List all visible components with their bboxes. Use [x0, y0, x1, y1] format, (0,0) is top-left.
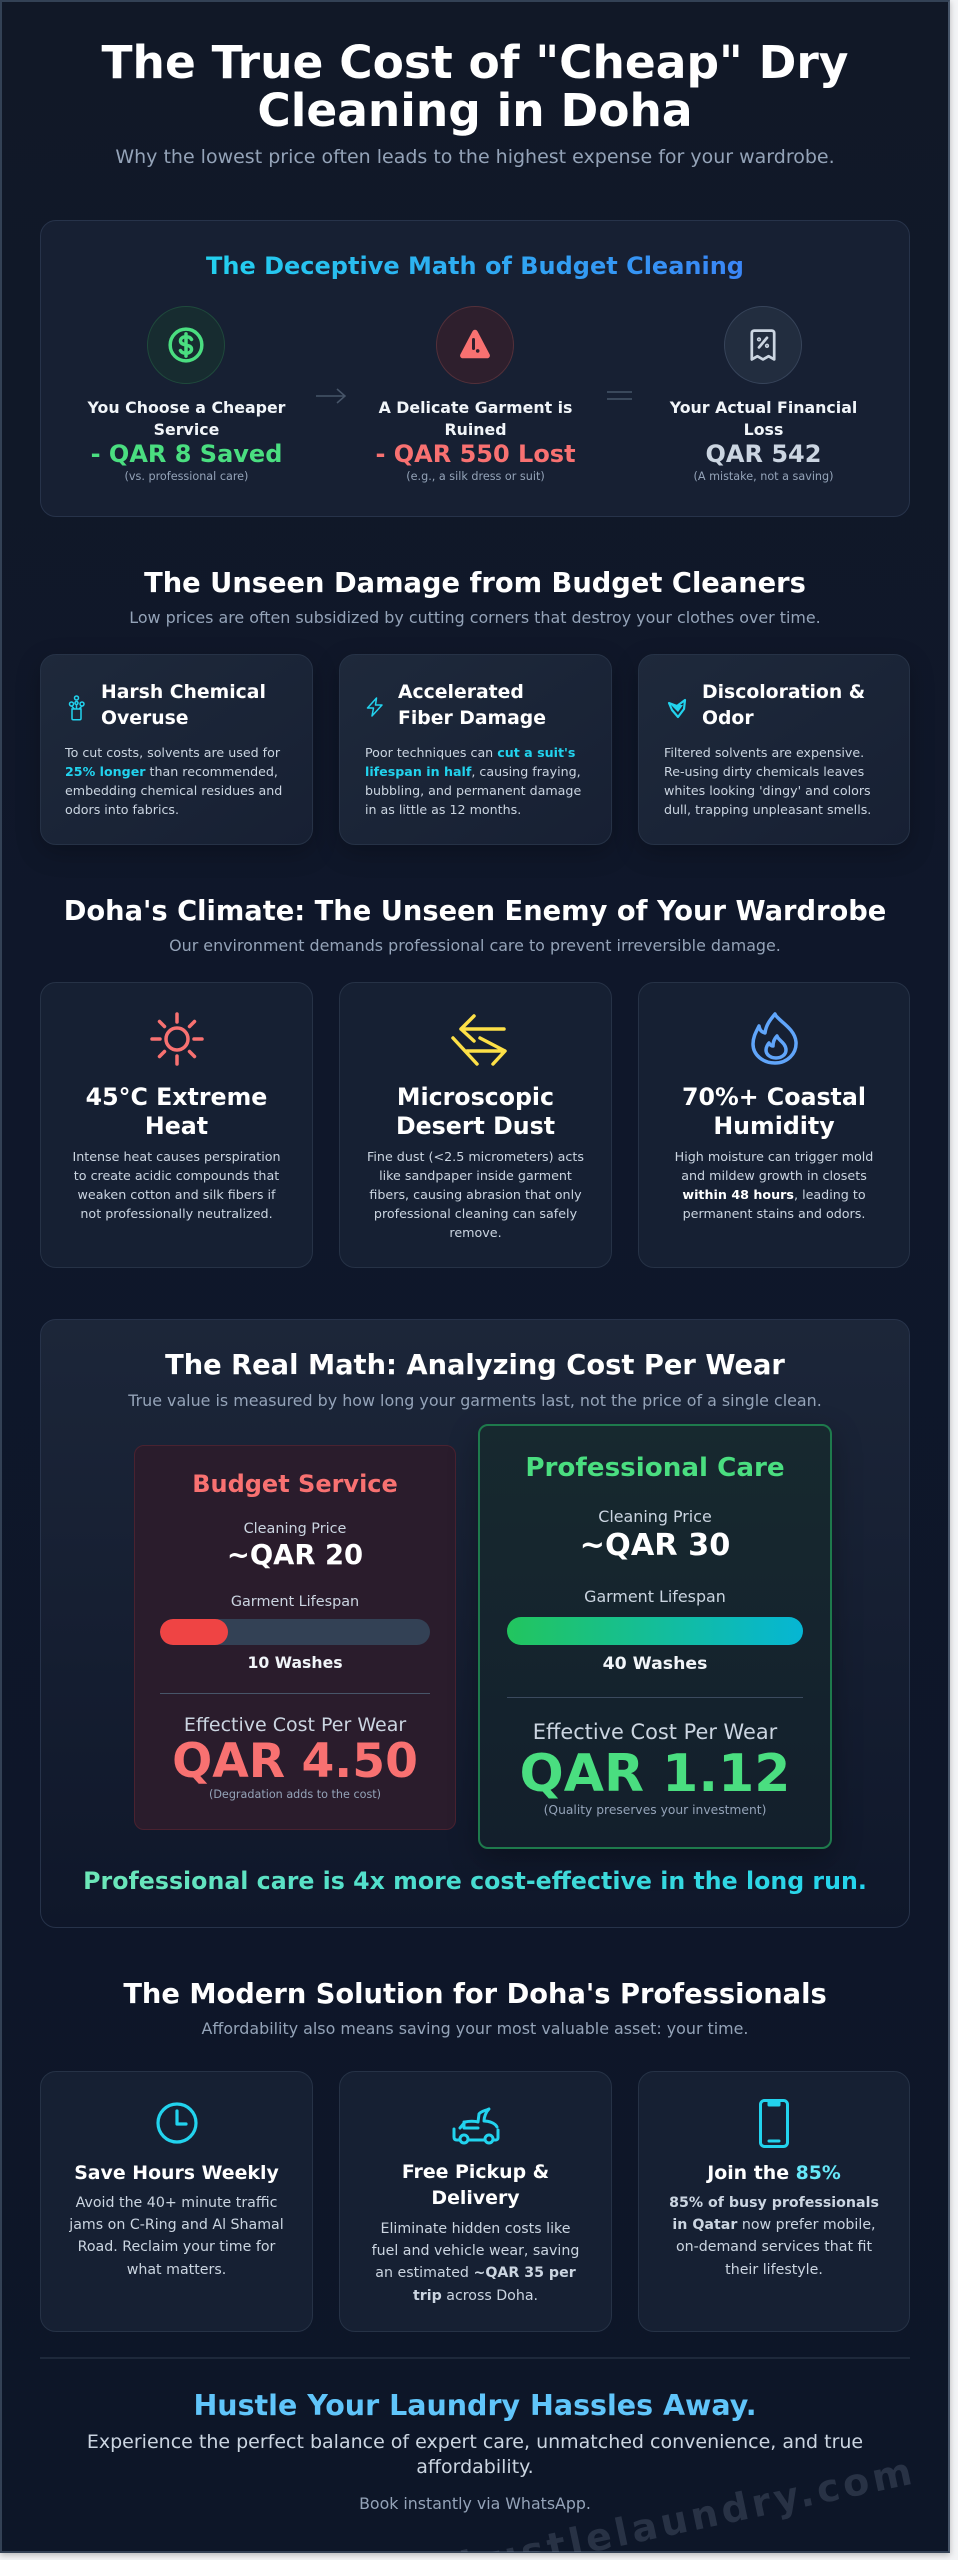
card heading	[682, 1083, 866, 1140]
subheading: real math: True value is measured by how long your garments last, not the price of a single clean.	[128, 1391, 822, 1410]
step 1 text: - QAR 8 Saved	[91, 440, 282, 468]
lifespan bar	[507, 1617, 803, 1645]
card body: whites looking 'dingy' and colors	[664, 783, 871, 798]
card body: Re-using dirty chemicals leaves	[664, 764, 864, 779]
step 2 text: A Delicate Garment is	[379, 398, 572, 417]
professional care card	[478, 1424, 832, 1849]
step 2 text: (e.g., a silk dress or suit)	[406, 470, 545, 483]
card heading	[396, 1083, 555, 1140]
card: fiber damage	[339, 654, 612, 845]
step 2 text: - QAR 550 Lost	[375, 440, 576, 468]
price value: ~QAR 20	[227, 1540, 363, 1571]
card body: remove.	[449, 1225, 502, 1240]
icon: warning triangle	[436, 306, 514, 384]
card heading: Harsh Chemical	[101, 682, 266, 703]
budget service card	[134, 1445, 456, 1830]
card: save hours	[40, 2071, 313, 2332]
divider	[160, 1693, 430, 1694]
step 2 text	[375, 398, 576, 483]
icon: flame	[751, 1012, 798, 1065]
card body: Road. Reclaim your time for	[78, 2239, 275, 2255]
call to action text: Experience the perfect balance of expert care, unmatched convenience, and true	[87, 2431, 863, 2453]
card body: dull, trapping unpleasant smells.	[664, 802, 871, 817]
step 3 text: Loss	[744, 420, 783, 439]
effective cost label: Effective Cost Per Wear	[184, 1714, 406, 1736]
heading: modern solution: The Modern Solution for Doha's Professionals	[123, 1979, 827, 2010]
card body: weaken cotton and silk fibers if	[78, 1187, 275, 1202]
card body: what matters.	[127, 2262, 226, 2278]
icon: dollar coin	[147, 306, 225, 384]
card: join	[638, 2071, 910, 2332]
card body: jams on C-Ring and Al Shamal	[69, 2217, 284, 2233]
heading: climate: Doha's Climate: The Unseen Enemy of Your Wardrobe	[64, 896, 886, 927]
step 1 text: You Choose a Cheaper	[88, 398, 285, 417]
card heading: Save Hours Weekly	[74, 2162, 279, 2184]
heading: unseen damage: The Unseen Damage from Budget Cleaners	[144, 568, 806, 599]
card body: bubbling, and permanent damage	[365, 783, 581, 798]
card heading: Join the 85%	[707, 2162, 841, 2184]
card body: trip across Doha.	[413, 2288, 538, 2304]
call to action text	[87, 2431, 863, 2478]
professional heading: Professional Care	[525, 1453, 785, 1483]
card body: professional cleaning can safely	[374, 1206, 577, 1221]
card heading	[702, 682, 865, 729]
title	[102, 36, 848, 136]
price value: ~QAR 30	[580, 1528, 730, 1563]
card heading: Humidity	[713, 1112, 835, 1140]
lifespan label: Garment Lifespan	[231, 1594, 359, 1610]
card heading: Accelerated	[398, 682, 524, 703]
degradation note: (Degradation adds to the cost)	[209, 1788, 381, 1801]
card body: Poor techniques can cut a suit's	[365, 745, 575, 760]
effective cost value: QAR 4.50	[172, 1734, 418, 1789]
icon: clock	[156, 2102, 198, 2144]
step 1 text: Service	[154, 420, 219, 439]
card body: to create acidic compounds that	[74, 1168, 279, 1183]
step 2 text: Ruined	[444, 420, 507, 439]
card heading: 70%+ Coastal	[682, 1083, 866, 1111]
card body	[69, 2195, 284, 2278]
card body	[372, 2221, 579, 2304]
card heading: Fiber Damage	[398, 708, 546, 729]
card heading: Overuse	[101, 708, 188, 729]
card body: within 48 hours, leading to	[682, 1187, 866, 1202]
step 3 text: QAR 542	[706, 440, 821, 468]
card body	[367, 1149, 584, 1240]
step 1 text	[87, 398, 286, 483]
card body: an estimated ~QAR 35 per	[375, 2265, 576, 2281]
card body: Filtered solvents are expensive.	[664, 745, 864, 760]
card body: Avoid the 40+ minute traffic	[76, 2195, 277, 2211]
card body	[365, 745, 581, 817]
divider	[507, 1697, 803, 1698]
card heading: Free Pickup &	[402, 2161, 549, 2183]
card heading	[101, 682, 266, 729]
cleaning price: Cleaning Price	[244, 1521, 346, 1537]
icon: bolt	[366, 697, 383, 717]
card body: and mildew growth in closets	[681, 1168, 867, 1183]
title: Cleaning in Doha	[257, 84, 693, 136]
subheading: modern solution: Affordability also means saving your most valuable asset: your time.	[202, 2019, 748, 2038]
title: The True Cost of "Cheap" Dry	[102, 36, 848, 89]
card body: fuel and vehicle wear, saving	[372, 2243, 579, 2259]
card body: 25% longer than recommended,	[65, 764, 278, 779]
card heading: Heat	[145, 1112, 208, 1140]
card body	[64, 745, 282, 817]
panel heading: The Deceptive Math of Budget Cleaning	[206, 252, 744, 280]
panel: cost per wear	[40, 1319, 910, 1928]
card heading: Microscopic	[397, 1083, 554, 1111]
icon: drop	[668, 698, 686, 718]
call to action heading: Hustle Your Laundry Hassles Away.	[193, 2389, 757, 2422]
card heading	[86, 1083, 267, 1140]
budget heading: Budget Service	[192, 1470, 398, 1498]
card body: not professionally neutralized.	[80, 1206, 273, 1221]
card body: on-demand services that fit	[676, 2239, 872, 2255]
card body: lifespan in half, causing fraying,	[365, 764, 581, 779]
card: harsh chemical	[40, 654, 313, 845]
card heading: Delivery	[431, 2187, 520, 2209]
icon: phone	[759, 2099, 789, 2148]
panel heading	[185, 245, 765, 287]
card body: Eliminate hidden costs like	[381, 2221, 570, 2237]
card body: permanent stains and odors.	[683, 1206, 865, 1221]
card: discoloration	[638, 654, 910, 845]
card heading: Odor	[702, 708, 754, 729]
card body	[675, 1149, 873, 1221]
step 3 text	[670, 398, 857, 483]
arrow between steps	[316, 388, 346, 404]
card: heat	[40, 982, 313, 1268]
subtitle: Why the lowest price often leads to the highest expense for your wardrobe.	[115, 146, 835, 168]
card: dust	[339, 982, 612, 1268]
card body: To cut costs, solvents are used for	[65, 745, 280, 760]
card body	[664, 745, 871, 817]
card: humidity	[638, 982, 910, 1268]
conclusion tagline: Professional care is 4x more cost-effective in the long run.	[83, 1867, 867, 1895]
subheading: climate: Our environment demands professional care to prevent irreversible damage.	[169, 936, 781, 955]
card body: Intense heat causes perspiration	[72, 1149, 281, 1164]
washes: 40 Washes	[603, 1654, 707, 1674]
card: pickup	[339, 2071, 612, 2332]
equals sign	[607, 391, 632, 400]
card heading: 45°C Extreme	[86, 1083, 267, 1111]
quality note: (Quality preserves your investment)	[544, 1803, 766, 1817]
lifespan label: Garment Lifespan	[584, 1587, 726, 1606]
card body: 85% of busy professionals	[669, 2195, 879, 2211]
effective cost label: Effective Cost Per Wear	[533, 1720, 777, 1744]
heading: real math: The Real Math: Analyzing Cost Per Wear	[165, 1350, 785, 1381]
card body: Fine dust (<2.5 micrometers) acts	[367, 1149, 584, 1164]
lifespan bar	[160, 1619, 430, 1645]
card heading: Discoloration &	[702, 682, 865, 703]
card body: High moisture can trigger mold	[675, 1149, 873, 1164]
panel: deceptive math	[40, 220, 910, 517]
card body: odors into fabrics.	[65, 802, 179, 817]
step 3 text: Your Actual Financial	[670, 398, 857, 417]
cleaning price: Cleaning Price	[598, 1507, 712, 1526]
icon: crossing arrows	[451, 1014, 507, 1066]
step 1 text: (vs. professional care)	[125, 470, 248, 483]
card heading	[398, 682, 546, 729]
icon: receipt percent	[724, 306, 802, 384]
icon: car	[452, 2107, 500, 2144]
card body: embedding chemical residues and	[65, 783, 282, 798]
card body	[669, 2195, 879, 2278]
card body: fibers, causing abrasion that only	[369, 1187, 582, 1202]
effective cost value: QAR 1.12	[520, 1744, 790, 1804]
icon: sun	[150, 1012, 204, 1066]
icon: chemical	[68, 695, 85, 720]
card heading: Desert Dust	[396, 1112, 555, 1140]
subheading: unseen damage: Low prices are often subsidized by cutting corners that destroy your clothes over time.	[129, 608, 821, 627]
card body: like sandpaper inside garment	[379, 1168, 572, 1183]
card heading	[402, 2161, 549, 2209]
card body: in as little as 12 months.	[365, 802, 521, 817]
divider line	[40, 2357, 910, 2359]
card body	[72, 1149, 281, 1221]
call to action text: affordability.	[416, 2456, 534, 2478]
booking note: Book instantly via WhatsApp.	[359, 2494, 591, 2513]
card body: their lifestyle.	[725, 2262, 823, 2278]
step 3 text: (A mistake, not a saving)	[694, 470, 834, 483]
washes: 10 Washes	[247, 1653, 343, 1672]
card body: in Qatar now prefer mobile,	[672, 2217, 876, 2233]
